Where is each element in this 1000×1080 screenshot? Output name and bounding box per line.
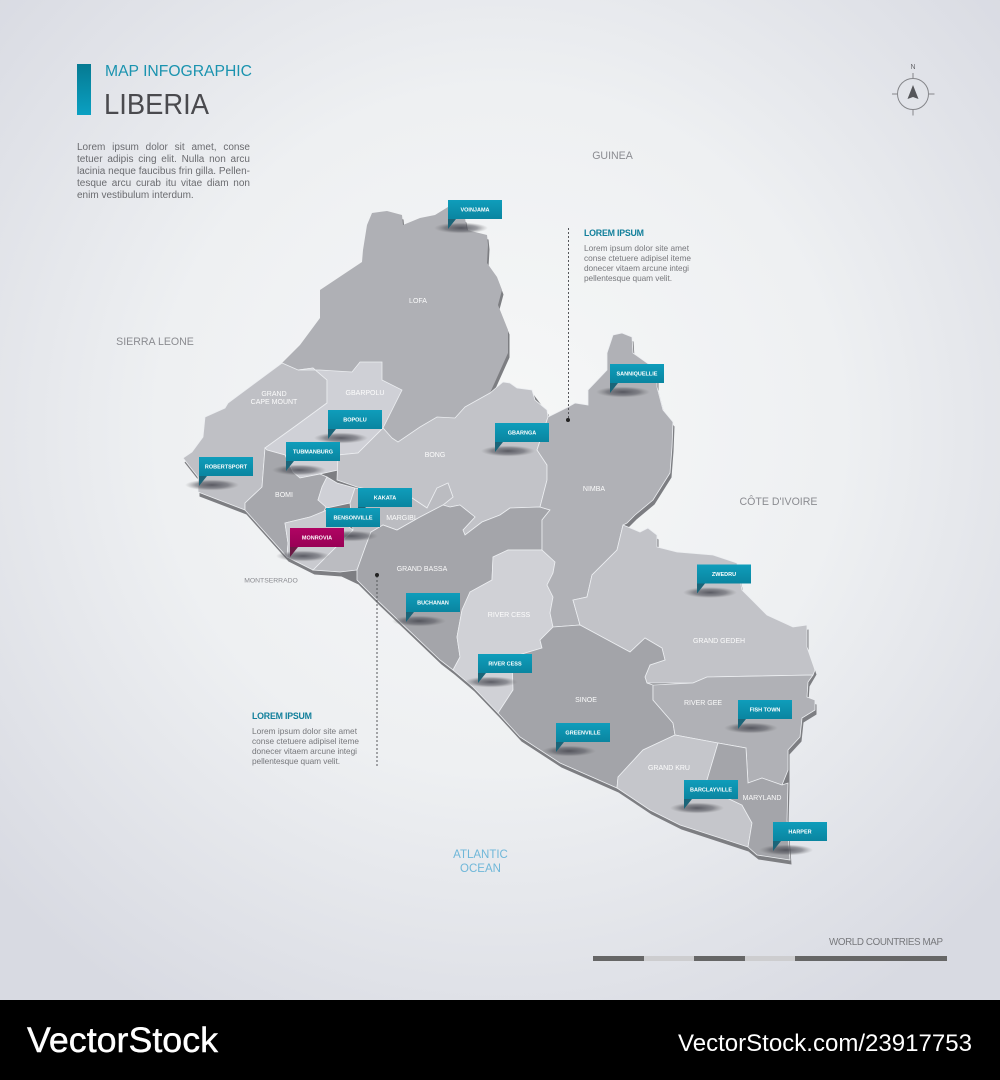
region: River Gee	[653, 675, 815, 785]
marker: Fish Town: FISH TOWN	[750, 708, 780, 714]
callout: bottom: LOREM IPSUM	[252, 711, 312, 721]
marker: Greenville: GREENVILLE	[565, 730, 601, 736]
region: Grand Kru	[617, 735, 752, 847]
intro text block: enim vestibulum interdum.	[77, 190, 194, 201]
callout: top: Lorem ipsum dolor site amet	[584, 243, 690, 253]
marker: Harper	[759, 822, 827, 856]
marker: Gbarnga: GBARNGA	[508, 430, 536, 436]
intro text block: Lorem ipsum dolor sit amet, conse	[77, 142, 250, 153]
marker: Voinjama	[434, 200, 502, 234]
callout: top: pellentesque quam velit.	[584, 273, 672, 283]
region: Grand Gedeh	[573, 525, 815, 683]
country labels: SIERRA LEONE	[116, 336, 194, 348]
callout: bottom: conse ctetuere adipisel iteme	[252, 736, 359, 746]
intro text block: tesque arcu curab itu vitae diam non	[77, 178, 250, 189]
title kicker: MAP INFOGRAPHIC	[105, 63, 252, 80]
region labels: BONG	[425, 452, 445, 459]
marker: Buchanan	[392, 593, 460, 626]
region labels: NIMBA	[583, 486, 605, 493]
icon: compass: N	[910, 64, 916, 71]
callout: bottom	[252, 573, 379, 768]
marker: Greenville	[542, 723, 610, 756]
marker: River Cess: RIVER CESS	[488, 662, 522, 668]
scale bar: WORLD COUNTRIES MAP	[829, 937, 943, 948]
marker: Zwedru	[683, 564, 751, 598]
intro text block	[77, 142, 250, 201]
marker: River Cess	[464, 654, 532, 688]
callout: bottom: donecer vitaem arcune integi	[252, 746, 357, 756]
region labels: RIVER GEE	[684, 700, 722, 707]
region labels: GRAND BASSA	[397, 566, 448, 573]
region: Grand Bassa	[357, 505, 550, 670]
region labels: LOFA	[409, 298, 427, 305]
marker: Barclayville	[670, 780, 738, 814]
region labels: MARGIBI	[386, 515, 416, 522]
region labels: RIVER CESS	[488, 612, 531, 619]
marker: Monrovia: MONROVIA	[302, 536, 332, 542]
marker: Fish Town	[724, 700, 792, 734]
marker: Monrovia	[276, 528, 344, 562]
region: River Cess	[453, 550, 555, 713]
marker: Harper: HARPER	[788, 830, 812, 836]
region: Montserrado upper	[318, 477, 355, 508]
callout: bottom: Lorem ipsum dolor site amet	[252, 726, 358, 736]
marker: Voinjama: VOINJAMA	[460, 208, 490, 214]
marker: Buchanan: BUCHANAN	[417, 600, 449, 606]
map of Liberia	[183, 207, 816, 864]
marker: Bensonville: BENSONVILLE	[333, 516, 373, 522]
marker: Robertsport	[185, 457, 253, 490]
region labels: GRAND GEDEH	[693, 638, 745, 645]
footer watermark bar: VectorStock	[27, 1021, 219, 1060]
marker: Sanniquellie	[596, 364, 664, 398]
marker: Kakata	[358, 488, 412, 517]
marker: Bopolu: BOPOLU	[343, 418, 367, 424]
region labels	[251, 298, 781, 802]
callout: bottom: pellentesque quam velit.	[252, 756, 340, 766]
region: Bomi	[245, 448, 328, 557]
callout: top: donecer vitaem arcune integi	[584, 263, 689, 273]
region: Bong	[337, 382, 548, 535]
region: Gbarpolu	[265, 362, 402, 478]
region labels: GBARPOLU	[346, 390, 384, 397]
marker: Zwedru: ZWEDRU	[712, 572, 736, 578]
footer watermark bar: VectorStock.com/23917753	[678, 1030, 972, 1057]
marker: Kakata: KAKATA	[374, 496, 396, 502]
map extrusion edge	[184, 212, 816, 864]
region labels: GRAND	[261, 391, 287, 398]
callout: top	[566, 228, 691, 422]
title: LIBERIA	[104, 89, 210, 121]
region labels: BOMI	[275, 492, 293, 499]
region labels: MARYLAND	[743, 795, 781, 802]
marker: Bensonville	[324, 508, 380, 542]
marker: Tubmanburg	[272, 442, 340, 476]
region: Lofa	[282, 207, 508, 442]
marker: Bopolu	[314, 410, 382, 444]
region labels: CAPE MOUNT	[251, 399, 298, 406]
footer watermark bar	[0, 1000, 1000, 1080]
country labels: ATLANTIC	[453, 849, 508, 861]
region: Maryland	[707, 743, 790, 860]
callout: top: LOREM IPSUM	[584, 228, 644, 238]
region labels: GRAND KRU	[648, 765, 690, 772]
country labels: MONTSERRADO	[244, 578, 298, 584]
country labels: OCEAN	[460, 863, 501, 875]
country labels: CÔTE D'IVOIRE	[740, 495, 817, 508]
region: Grand Cape Mount	[183, 363, 327, 510]
callout: top: conse ctetuere adipisel iteme	[584, 253, 691, 263]
region: Sinoe	[498, 625, 675, 788]
scale bar	[593, 937, 947, 961]
region: Margibi	[313, 483, 453, 572]
marker: Sanniquellie: SANNIQUELLIE	[617, 372, 658, 378]
marker: Robertsport: ROBERTSPORT	[205, 464, 248, 470]
marker: Barclayville: BARCLAYVILLE	[690, 788, 732, 794]
country labels	[116, 150, 817, 875]
icon: compass	[892, 64, 934, 116]
title block	[77, 63, 252, 121]
marker: Tubmanburg: TUBMANBURG	[293, 450, 333, 456]
marker: Gbarnga	[481, 423, 549, 456]
country labels: GUINEA	[592, 150, 634, 162]
intro text block: lacinia neque faucibus frin gilla. Pellen-	[77, 166, 250, 177]
title accent bar	[77, 64, 91, 115]
region labels: SINOE	[575, 697, 597, 704]
region: Nimba	[537, 333, 673, 627]
intro text block: tetuer adipis cing elit. Nulla non arcu	[77, 154, 250, 165]
region: Montserrado	[285, 510, 353, 570]
